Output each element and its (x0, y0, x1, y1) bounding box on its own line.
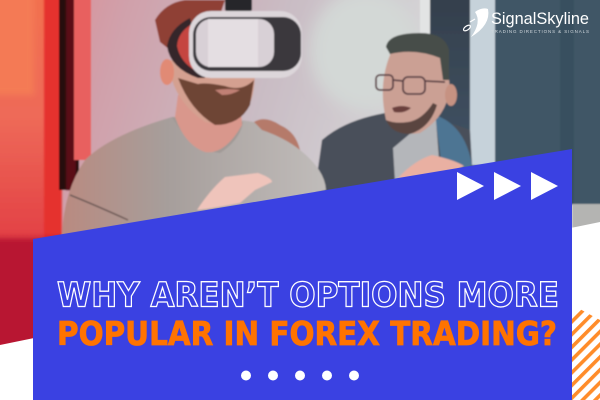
arrows (457, 172, 558, 200)
stripe decoration (572, 308, 600, 400)
raised hand (197, 173, 272, 210)
shirt (393, 120, 440, 182)
man with glasses (316, 32, 473, 192)
mouth (392, 106, 411, 112)
arrow 3 (531, 172, 558, 200)
headset (167, 11, 302, 78)
window glare on wall (308, 0, 402, 106)
hair (386, 33, 449, 80)
hair (155, 0, 225, 50)
hand on shoulder (254, 119, 300, 150)
ear (160, 59, 174, 85)
dark window area (420, 0, 600, 228)
wall background (60, 0, 420, 234)
face (383, 40, 450, 134)
arrow 1 (457, 172, 484, 200)
face (170, 60, 255, 124)
title line 1: WHY AREN’T OPTIONS MORE (57, 276, 559, 314)
sweatshirt (62, 117, 326, 240)
jacket (316, 112, 473, 192)
pagination dots (241, 370, 359, 380)
red lit left panel (0, 0, 91, 350)
neck (175, 95, 242, 152)
glasses (376, 75, 445, 94)
logo tagline: TRADING DIRECTIONS & SIGNALS (491, 29, 589, 34)
logo icon (463, 8, 488, 37)
arrow 2 (494, 172, 521, 200)
hand (398, 155, 464, 178)
beard (386, 103, 437, 134)
logo wordmark: SignalSkyline (491, 10, 589, 28)
man with VR headset (62, 0, 326, 240)
blue title panel (33, 149, 572, 400)
beard (178, 78, 254, 125)
logo: SignalSkyline (463, 8, 589, 37)
strap (225, 0, 252, 11)
